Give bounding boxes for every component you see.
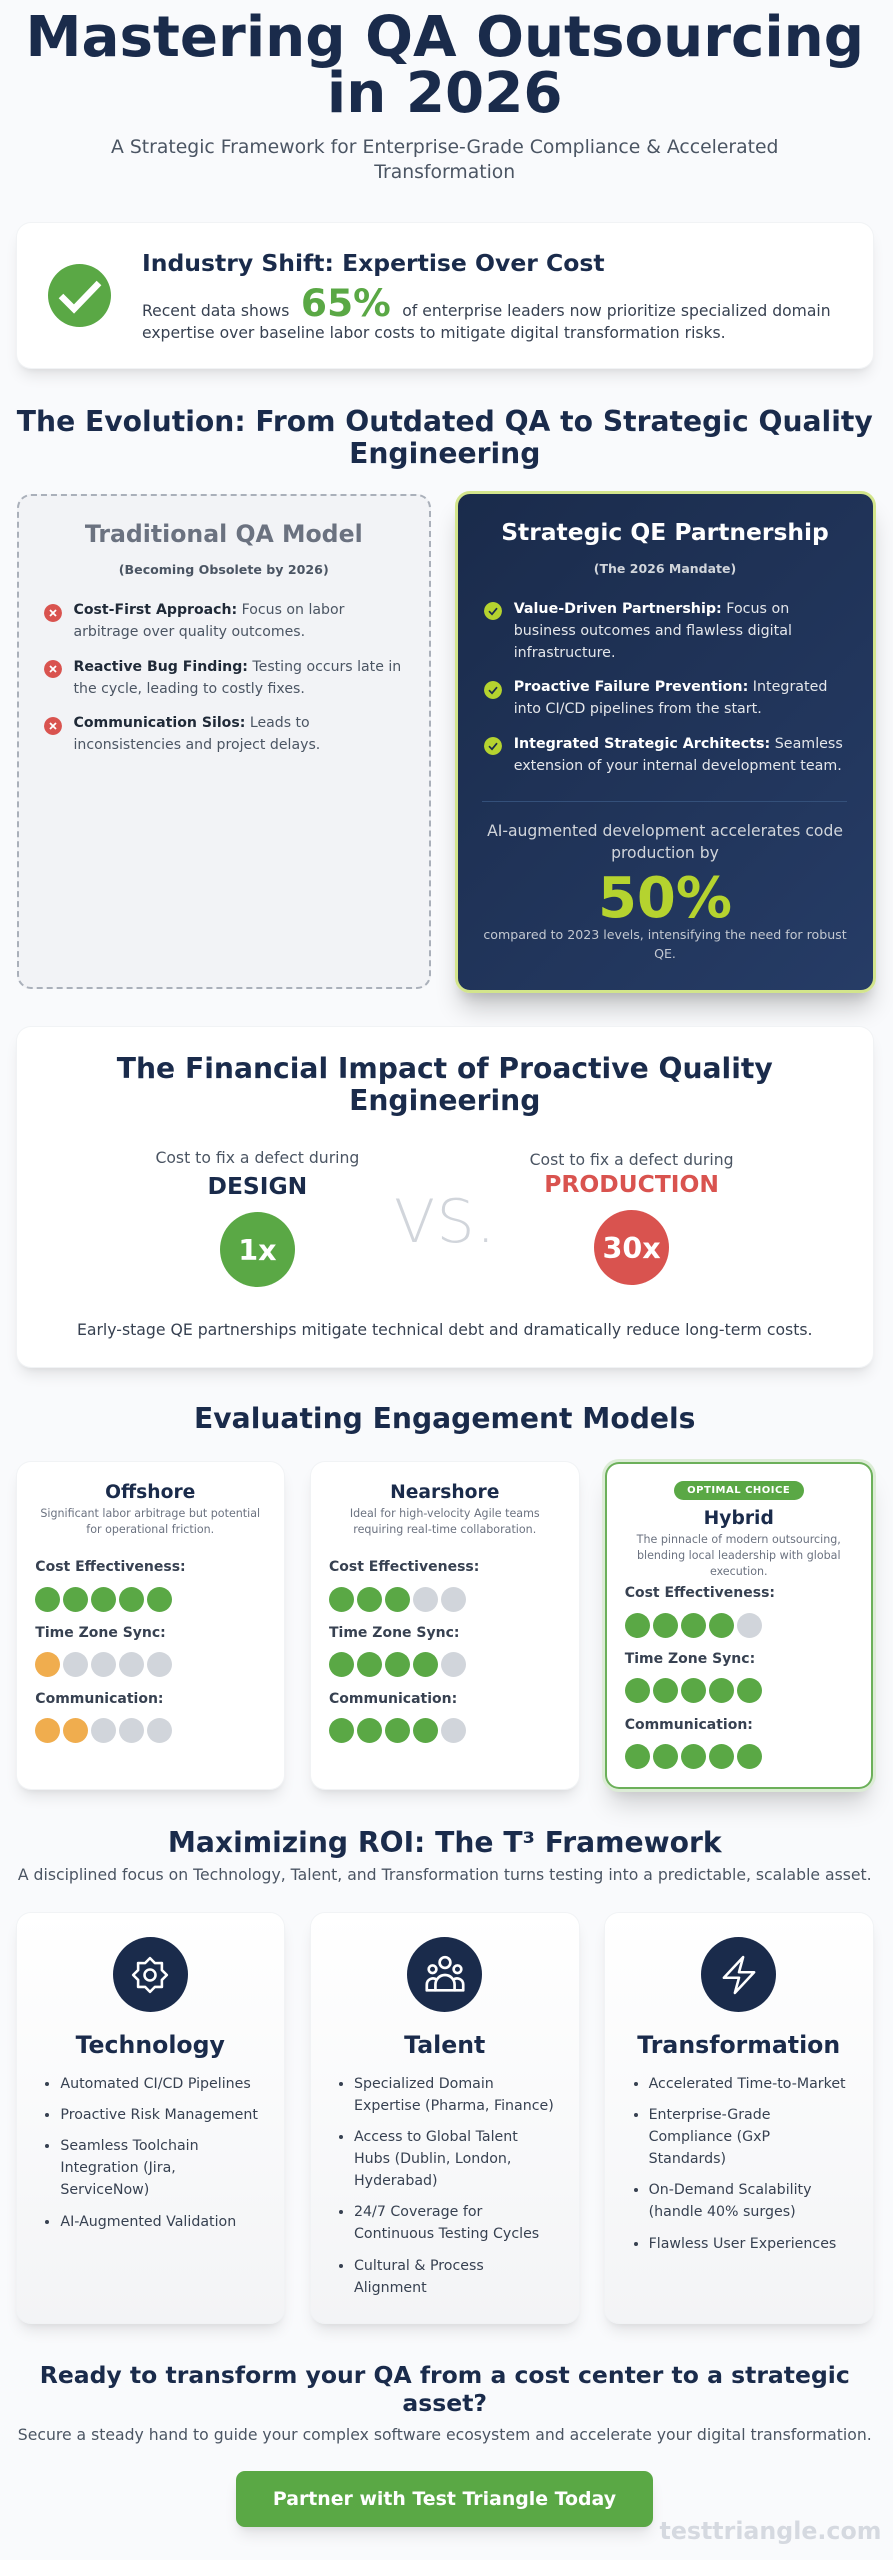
rating: cost effectiveness	[35, 1559, 186, 1612]
label: Cost Effectiveness:	[625, 1585, 775, 1601]
model description	[350, 1507, 540, 1536]
panel: strategic QE partnership	[448, 491, 882, 1020]
title: in 2026	[327, 61, 563, 126]
rating: cost effectiveness	[625, 1585, 775, 1638]
dots	[625, 1678, 762, 1703]
text: AI-augmented: AI-augmented development accelerates code	[487, 822, 843, 840]
heading: financial impact: Engineering	[349, 1084, 540, 1117]
label: Communication:	[35, 1691, 164, 1707]
rating: communication	[35, 1691, 172, 1743]
subtitle: Transformation	[374, 162, 515, 183]
subheading: mandate: (The 2026 Mandate)	[594, 561, 736, 576]
label: production: PRODUCTION	[544, 1170, 719, 1198]
icon: lightning bolt	[701, 1937, 776, 2012]
text: 65 percent statistic: expertise over baseline labor costs to mitigate digital transformation risks.	[142, 324, 726, 342]
subheading: obsolete: (Becoming Obsolete by 2026)	[119, 562, 329, 577]
item: reactive	[74, 658, 401, 696]
title	[25, 5, 864, 126]
dots	[329, 1652, 466, 1677]
heading: call to action: asset?	[402, 2389, 487, 2417]
label: Communication:	[625, 1717, 753, 1733]
list	[334, 2073, 554, 2308]
column: production cost	[530, 1150, 734, 1285]
panel: offshore	[16, 1462, 284, 1789]
button: partner: Partner with Test Triangle Today	[273, 2488, 616, 2510]
list: Proactive Risk Management	[60, 2107, 258, 2123]
dots	[35, 1652, 172, 1677]
item: architects: Integrated Strategic Architects: Seamless	[514, 736, 843, 752]
item: silos	[74, 715, 320, 753]
panel: financial impact	[16, 1027, 873, 1367]
stat: 50 percent: 50%	[598, 866, 732, 931]
item: silos: Communication Silos: Leads to	[74, 715, 310, 731]
heading: call to action: Ready to transform your QA from a cost center to a strategic	[40, 2361, 850, 2389]
list	[40, 2073, 258, 2242]
label: Time Zone Sync:	[625, 1651, 755, 1667]
model description: The pinnacle of modern outsourcing,	[637, 1533, 841, 1546]
text: T3 subtitle: A disciplined focus on Technology, Talent, and Transformation turns testing into a predictable, scalable asset.	[18, 1865, 872, 1884]
item: value-driven: business outcomes and flawless digital	[514, 623, 792, 639]
list: Specialized Domain	[354, 2076, 494, 2092]
heading: the evolution: The Evolution: From Outdated QA to Strategic Quality	[17, 405, 873, 438]
panel: talent	[311, 1913, 578, 2323]
rating: communication	[625, 1715, 855, 1769]
item: architects: extension of your internal development team.	[514, 758, 842, 774]
list	[629, 2073, 846, 2264]
list: 24/7 Coverage for	[354, 2204, 482, 2220]
badge: 30x: 30x	[602, 1231, 661, 1265]
panel: traditional QA model	[17, 494, 431, 989]
icon: x	[44, 660, 62, 678]
list: Accelerated Time-to-Market	[649, 2076, 846, 2092]
model description: requiring real-time collaboration.	[353, 1523, 536, 1536]
dots	[329, 1587, 466, 1612]
dots	[35, 1718, 172, 1743]
list: Standards)	[649, 2151, 726, 2167]
heading: the evolution: Engineering	[349, 437, 540, 470]
subtitle	[111, 137, 778, 183]
dots	[625, 1744, 762, 1769]
panel: hybrid	[605, 1462, 872, 1789]
badge: 1x: 1x	[238, 1233, 277, 1267]
panel: nearshore	[311, 1462, 578, 1789]
title: Mastering QA Outsourcing	[25, 5, 864, 70]
badge: 30x	[594, 1210, 669, 1285]
item: proactive	[514, 679, 827, 717]
item: cost-first: arbitrage over quality outcomes.	[74, 624, 305, 640]
icon: green check	[48, 264, 111, 327]
list: Hyderabad)	[354, 2173, 438, 2189]
item: value-driven: infrastructure.	[514, 645, 615, 661]
list: AI-Augmented Validation	[60, 2214, 236, 2230]
icon: check	[484, 602, 502, 620]
caption: Cost to fix a defect during	[530, 1150, 734, 1169]
item: reactive: the cycle, leading to costly fixes.	[74, 680, 305, 696]
rating: time zone sync	[329, 1625, 466, 1677]
rating: communication	[329, 1691, 466, 1743]
icon: gear	[113, 1937, 188, 2012]
text: summary: Early-stage QE partnerships mitigate technical debt and dramatically reduce long-term costs.	[77, 1320, 813, 1339]
label: design: DESIGN	[208, 1172, 307, 1200]
label: Time Zone Sync:	[329, 1625, 459, 1641]
item: silos: inconsistencies and project delays.	[74, 737, 320, 753]
heading: the evolution	[16, 405, 873, 470]
panel frame	[454, 491, 876, 993]
text: call to action subtitle: Secure a steady hand to guide your complex software ecosystem and accelerate your digital transformation.	[18, 2425, 872, 2444]
title: Talent	[404, 2031, 485, 2059]
rating: time zone sync	[625, 1649, 855, 1703]
dots	[35, 1587, 172, 1612]
list: Alignment	[354, 2280, 427, 2296]
watermark: testtriangle.com	[660, 2517, 881, 2545]
list: Flawless User Experiences	[649, 2236, 836, 2252]
title: Technology	[76, 2031, 225, 2059]
item: proactive: into CI/CD pipelines from the start.	[514, 701, 762, 717]
button: partner	[236, 2471, 653, 2527]
list: ServiceNow)	[60, 2182, 149, 2198]
rating: time zone sync	[35, 1625, 172, 1677]
label: Cost Effectiveness:	[329, 1559, 479, 1575]
list: (handle 40% surges)	[649, 2204, 796, 2220]
item: cost-first: Cost-First Approach: Focus on labor	[74, 602, 344, 618]
list: Enterprise-Grade	[649, 2107, 770, 2123]
model description: Significant labor arbitrage but potential	[40, 1507, 260, 1520]
panel frame	[16, 494, 431, 989]
column: design cost	[155, 1148, 359, 1287]
icon: x	[44, 717, 62, 735]
model description: blending local leadership with global	[637, 1549, 841, 1562]
item: reactive: Reactive Bug Finding: Testing occurs late in	[74, 658, 401, 674]
text: compared to 2023	[483, 927, 847, 961]
heading: financial impact	[116, 1052, 773, 1117]
panel: technology	[16, 1913, 284, 2323]
model title: Hybrid	[704, 1508, 774, 1529]
heading: T3 framework: Maximizing ROI: The T³ Framework	[168, 1826, 722, 1859]
item: architects	[514, 736, 843, 774]
heading: financial impact: The Financial Impact of Proactive Quality	[117, 1052, 773, 1085]
item: value-driven	[514, 601, 792, 661]
list: Integration (Jira,	[60, 2160, 176, 2176]
item: cost-first	[74, 602, 344, 640]
text: compared to 2023: QE.	[654, 946, 676, 961]
heading: traditional: Traditional QA Model	[85, 520, 363, 548]
heading: strategic: Strategic QE Partnership	[501, 518, 829, 546]
model title: Nearshore	[390, 1482, 499, 1503]
list: Cultural & Process	[354, 2258, 484, 2274]
list: Access to Global Talent	[354, 2129, 518, 2145]
list: Seamless Toolchain	[60, 2138, 199, 2154]
badge: optimal choice	[674, 1481, 804, 1500]
list: Hubs (Dublin, London,	[354, 2151, 511, 2167]
list: Continuous Testing Cycles	[354, 2226, 539, 2242]
model description	[636, 1533, 841, 1578]
text: 65 percent statistic: Recent data shows 65% of enterprise leaders now prioritize specialized domain	[142, 280, 831, 324]
label: Communication:	[329, 1691, 457, 1707]
label: Time Zone Sync:	[35, 1625, 166, 1641]
subtitle: A Strategic Framework for Enterprise-Grade Compliance & Accelerated	[111, 137, 778, 158]
list: On-Demand Scalability	[649, 2182, 811, 2198]
model description	[40, 1507, 260, 1536]
icon: check	[484, 737, 502, 755]
rating: cost effectiveness	[329, 1559, 479, 1612]
list: Compliance (GxP	[649, 2129, 770, 2145]
text: AI-augmented: production by	[611, 844, 719, 862]
item: value-driven: Value-Driven Partnership: Focus on	[514, 601, 789, 617]
text: AI-augmented	[487, 822, 843, 862]
item: proactive: Proactive Failure Prevention: Integrated	[514, 679, 827, 695]
label: Cost Effectiveness:	[35, 1559, 186, 1575]
caption: Cost to fix a defect during	[155, 1148, 359, 1167]
model description: Ideal for high-velocity Agile teams	[350, 1507, 540, 1520]
list: Expertise (Pharma, Finance)	[354, 2098, 554, 2114]
heading: call to action	[0, 2361, 890, 2418]
dots	[329, 1718, 466, 1743]
badge: 1x	[220, 1212, 295, 1287]
panel: transformation	[605, 1913, 872, 2323]
badge: optimal choice: OPTIMAL CHOICE	[687, 1485, 790, 1496]
text: compared to 2023: compared to 2023 levels, intensifying the need for robust	[483, 927, 847, 942]
heading: engagement models: Evaluating Engagement Models	[194, 1402, 695, 1435]
list: Automated CI/CD Pipelines	[60, 2076, 251, 2092]
title: Transformation	[637, 2031, 840, 2059]
model description: for operational friction.	[86, 1523, 214, 1536]
icon: check	[484, 681, 502, 699]
text: versus: VS.	[394, 1187, 497, 1257]
model description: execution.	[710, 1565, 768, 1578]
model title: Offshore	[105, 1482, 195, 1503]
icon: x	[44, 604, 62, 622]
dots	[625, 1613, 762, 1638]
icon: people	[407, 1937, 482, 2012]
panel: industry shift	[16, 223, 873, 368]
heading: industry shift: Industry Shift: Expertise Over Cost	[142, 249, 605, 277]
